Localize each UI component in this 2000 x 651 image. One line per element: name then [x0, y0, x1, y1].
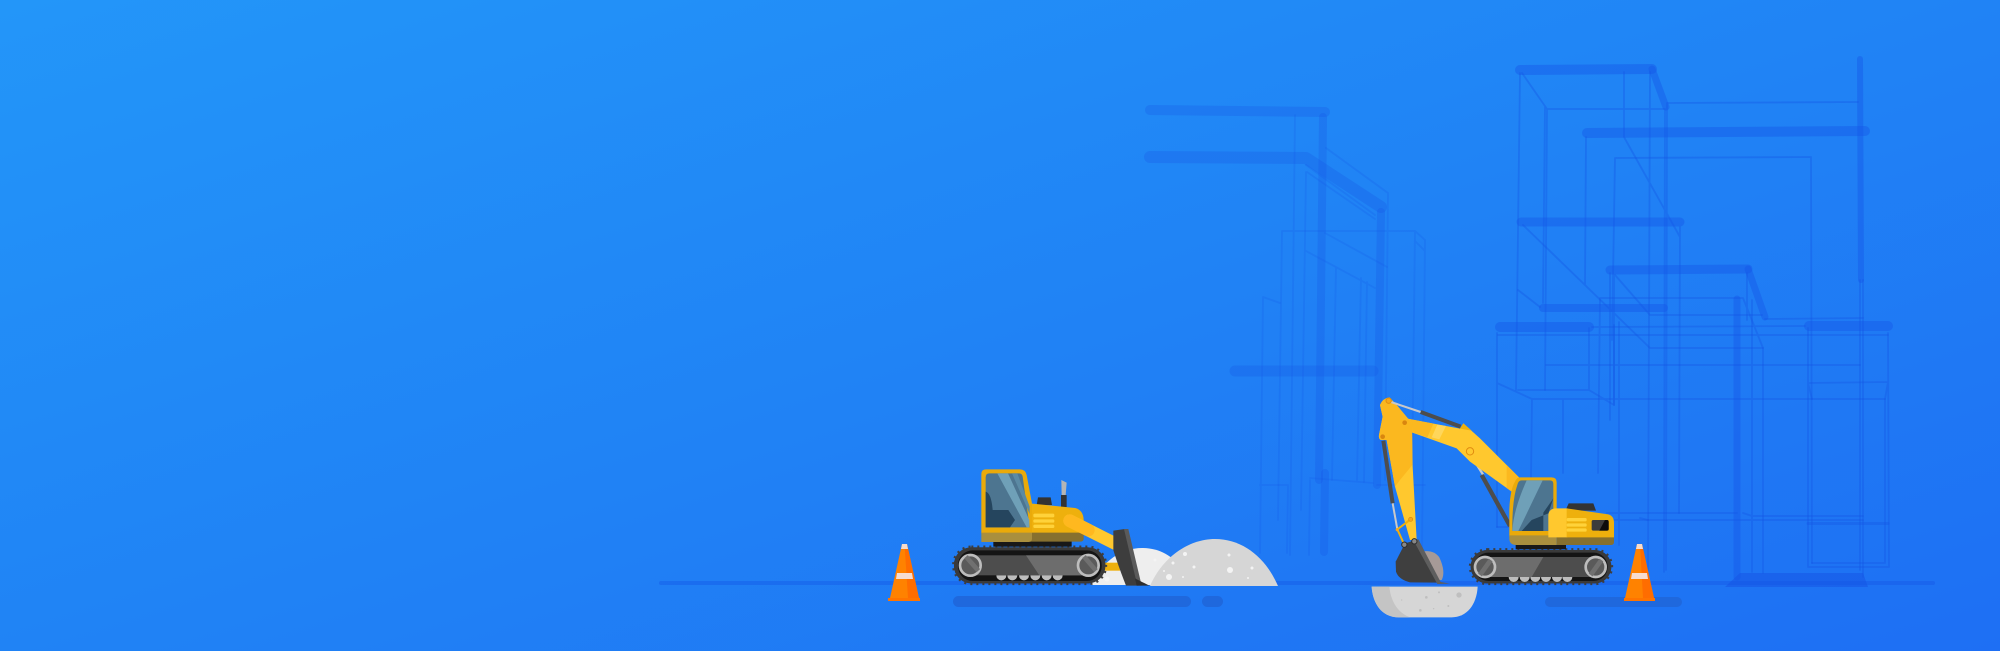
concrete bowl pit — [1372, 587, 1478, 617]
scaffold base block — [1725, 573, 1868, 587]
boom cylinder — [1472, 457, 1510, 526]
undercarriage — [1516, 545, 1566, 549]
hinge pins — [1380, 398, 1474, 547]
bulldozer — [954, 469, 1149, 586]
bucket — [1396, 539, 1450, 584]
bulldozer track — [954, 547, 1105, 583]
stick arm — [1379, 397, 1417, 540]
engine housing — [1030, 503, 1084, 534]
blade — [1113, 529, 1149, 586]
engine housing — [1548, 508, 1614, 537]
stick cylinders — [1383, 402, 1461, 544]
left scaffold wireframe — [1150, 110, 1425, 555]
engine cover — [1565, 503, 1596, 511]
ground line — [659, 581, 1935, 585]
arm — [1070, 521, 1116, 544]
right scaffold wireframe — [1497, 59, 1889, 577]
undercarriage — [993, 541, 1072, 547]
traffic cone right — [1624, 544, 1655, 601]
blade link — [1105, 563, 1120, 571]
engine vents — [1033, 514, 1054, 528]
cab — [981, 469, 1032, 542]
bucket rock — [1422, 551, 1443, 580]
exhaust and air filter — [1037, 480, 1067, 507]
traffic cone left — [888, 544, 920, 601]
excavator — [1379, 397, 1614, 584]
excavator cab — [1509, 477, 1614, 545]
excavator track — [1471, 550, 1611, 583]
ground shadow bars — [953, 596, 1682, 607]
gravel piles — [1091, 539, 1278, 586]
boom — [1401, 418, 1520, 494]
